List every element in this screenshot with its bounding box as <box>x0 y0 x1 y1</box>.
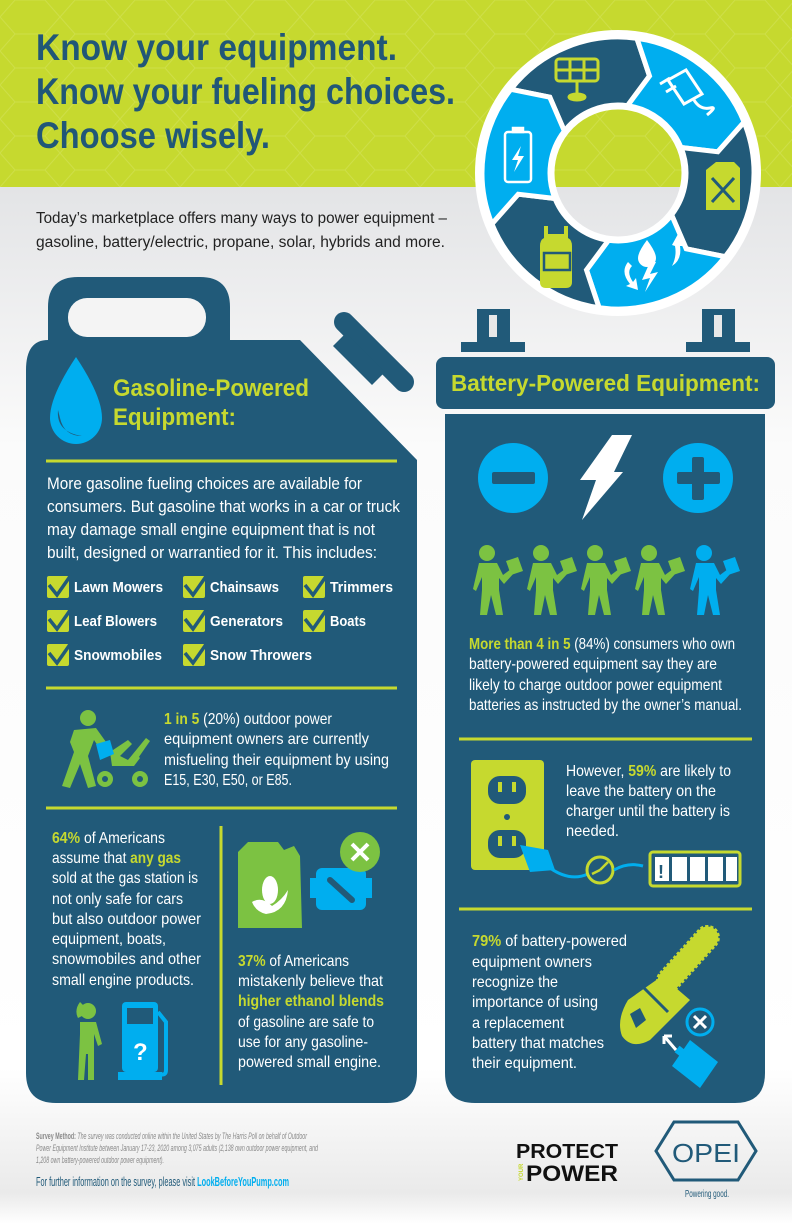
text: gasoline intro: consumers. But gasoline that works in a car or truck <box>47 497 400 516</box>
checklist: Leaf Blowers <box>74 613 157 630</box>
icon: confused person <box>76 1002 102 1080</box>
checklist: Lawn Mowers <box>74 579 163 596</box>
text: 79% replacement battery: 79% of battery-powered <box>472 933 627 950</box>
footer: survey method <box>36 1131 318 1165</box>
battery body <box>445 414 765 1103</box>
heading: gasoline: Gasoline-Powered <box>113 375 309 402</box>
icon: solar panel <box>556 59 598 100</box>
text: 79% replacement battery: their equipment. <box>472 1055 577 1072</box>
text: 64% of Americans: but also outdoor power <box>52 911 202 928</box>
icon: water and energy <box>624 234 684 292</box>
footer: survey method: Survey Method: The survey was conducted online within the United States by The Harris Poll on behalf of Outdoor <box>36 1131 308 1141</box>
text: 1 in 5 misfueling: misfueling their equipment by using <box>164 752 389 769</box>
spout <box>333 322 404 385</box>
text: 64% of Americans: sold at the gas station is <box>52 870 198 887</box>
logo: OPEI: Powering good. <box>685 1189 729 1200</box>
text: gasoline intro: built, designed or warrantied for it. This includes: <box>47 543 377 562</box>
checklist: Snowmobiles <box>74 647 162 664</box>
icon: plus <box>663 443 733 513</box>
icon: gas pump with question mark <box>118 1002 166 1080</box>
text: 79% replacement battery: a replacement <box>472 1015 565 1032</box>
icon: gas drop <box>50 357 102 444</box>
text: 64% of Americans: small engine products. <box>52 972 194 989</box>
checklist <box>47 575 393 666</box>
icon: outlet, plug, timer, battery: ! <box>658 862 664 882</box>
battery header <box>436 357 775 409</box>
intro text <box>36 210 447 251</box>
footer: survey method: 1,208 own battery-powered outdoor power equipment). <box>36 1155 164 1165</box>
text: 1 in 5 misfueling: equipment owners are currently <box>164 731 369 748</box>
text: 64% of Americans: not only safe for cars <box>52 891 183 908</box>
text: 84% charge as instructed: likely to charge outdoor power equipment <box>469 677 722 694</box>
footer: survey method: Power Equipment Institute between January 17-23, 2020 among 3,075 adults (2,138 own outdoor power equipment, and <box>36 1143 318 1153</box>
logo: protect your power <box>516 1141 618 1186</box>
logo: OPEI: OPEI <box>672 1138 740 1168</box>
checklist: Boats <box>330 613 366 630</box>
icon: minus <box>478 443 548 513</box>
logo: protect your power: POWER <box>526 1161 618 1186</box>
text: 64% of Americans: assume that any gas <box>52 850 181 867</box>
text: gasoline intro: More gasoline fueling choices are available for <box>47 474 362 493</box>
text: 59% leave on charger <box>566 763 731 840</box>
panel: gasoline-powered equipment (gas can) <box>26 277 417 1103</box>
checklist: Chainsaws <box>210 579 279 596</box>
text: 37% of Americans: powered small engine. <box>238 1054 381 1071</box>
text: 37% of Americans: higher ethanol blends <box>238 993 384 1010</box>
text: 84% charge as instructed: batteries as instructed by the owner’s manual. <box>469 697 742 714</box>
title: Know your equipment. <box>36 27 397 68</box>
text: 1 in 5 misfueling: 1 in 5 (20%) outdoor power <box>164 711 333 728</box>
text: gasoline intro <box>47 474 400 562</box>
logo: protect your power: YOUR <box>519 1163 525 1181</box>
title: Choose wisely. <box>36 115 270 156</box>
panel: battery-powered equipment <box>436 309 775 1103</box>
checklist: Snow Throwers <box>210 647 312 664</box>
checklist: Generators <box>210 613 283 630</box>
heading: gasoline <box>113 375 309 431</box>
icon: plug <box>660 70 713 115</box>
footer: further information: For further information on the survey, please visit LookBeforeYouPump.com <box>36 1174 289 1189</box>
text: 37% of Americans: of gasoline are safe to <box>238 1014 374 1031</box>
text: 59% leave on charger: needed. <box>566 823 619 840</box>
icon: outlet, plug, timer, battery <box>471 760 740 886</box>
text: 1 in 5 misfueling: E15, E30, E50, or E85. <box>164 772 292 789</box>
title: Know your fueling choices. <box>36 71 455 112</box>
fuel choices ring <box>479 34 757 312</box>
text: 64% of Americans: equipment, boats, <box>52 931 166 948</box>
text: 79% replacement battery: battery that matches <box>472 1035 604 1052</box>
text: 64% of Americans <box>52 830 202 989</box>
text: 84% charge as instructed: battery-powered equipment say they are <box>469 656 717 673</box>
intro text: Today’s marketplace offers many ways to power equipment – <box>36 210 447 227</box>
icon: lightning bolt <box>580 435 632 520</box>
icon: gas pump with question mark: ? <box>133 1039 148 1066</box>
intro text: gasoline, battery/electric, propane, solar, hybrids and more. <box>36 234 445 251</box>
heading: gasoline: Equipment: <box>113 404 236 431</box>
text: 64% of Americans: snowmobiles and other <box>52 951 202 968</box>
logo: OPEI <box>656 1122 756 1200</box>
title <box>36 27 455 156</box>
checklist: Trimmers <box>330 579 393 596</box>
text: 64% of Americans: 64% of Americans <box>52 830 165 847</box>
text: 37% of Americans: mistakenly believe that <box>238 973 383 990</box>
text: gasoline intro: may damage small engine equipment that is not <box>47 520 375 539</box>
icon: battery <box>505 128 531 182</box>
text: 79% replacement battery: importance of using <box>472 994 598 1011</box>
icon: ethanol can and engine <box>238 832 380 928</box>
text: 84% charge as instructed <box>469 636 742 714</box>
icon: person refueling mower <box>62 710 150 788</box>
icon: chainsaw with battery <box>620 922 723 1088</box>
text: 59% leave on charger: However, 59% are likely to <box>566 763 731 780</box>
text: 37% of Americans <box>238 953 384 1071</box>
battery terminals <box>461 309 750 352</box>
icon: jerry can <box>706 162 740 210</box>
text: 79% replacement battery: recognize the <box>472 974 558 991</box>
text: 79% replacement battery <box>472 933 627 1072</box>
text: 1 in 5 misfueling <box>164 711 389 789</box>
logo: protect your power: PROTECT <box>516 1141 618 1163</box>
text: 79% replacement battery: equipment owners <box>472 954 592 971</box>
panel: battery-powered equipment: Battery-Powered Equipment: <box>451 370 760 396</box>
text: 84% charge as instructed: More than 4 in 5 (84%) consumers who own <box>469 636 735 653</box>
icon: people reading manuals <box>473 545 740 615</box>
handle opening <box>68 298 206 337</box>
icon: propane tank <box>540 226 572 288</box>
text: 59% leave on charger: charger until the battery is <box>566 803 730 820</box>
green header band <box>0 0 792 187</box>
text: 37% of Americans: use for any gasoline- <box>238 1034 368 1051</box>
text: 59% leave on charger: leave the battery on the <box>566 783 716 800</box>
text: 37% of Americans: 37% of Americans <box>238 953 349 970</box>
